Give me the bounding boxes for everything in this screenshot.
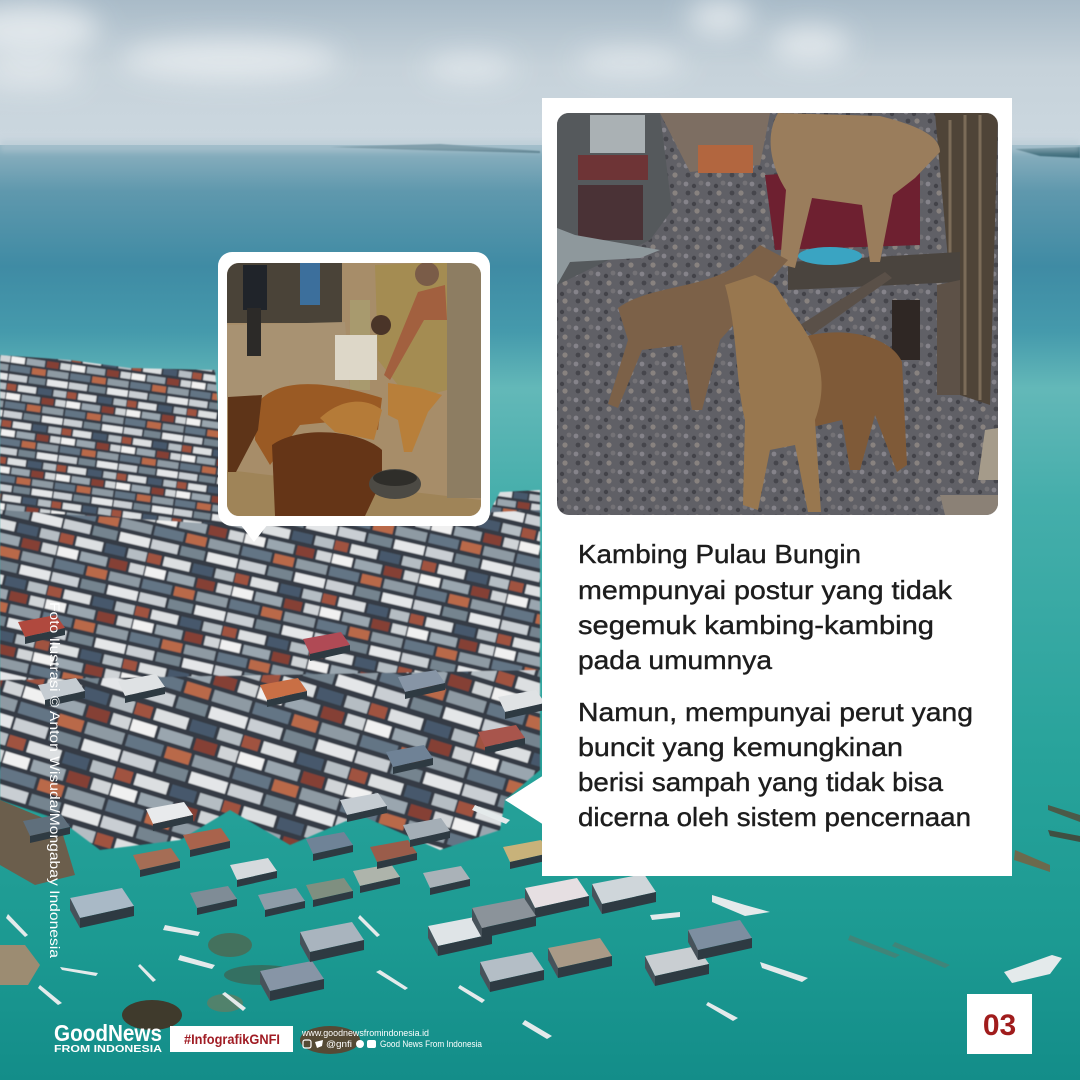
text block: paragraph 1: segemuk kambing-kambing [578, 610, 934, 640]
text block: paragraph 1: pada umumnya [578, 645, 773, 675]
website and social handles [301, 1028, 482, 1049]
text block: paragraph 2: Namun, mempunyai perut yang [578, 697, 973, 727]
photo credit: Foto Ilustrasi © Anton Wisuda/Mongabay Indonesia [47, 602, 62, 959]
text block: paragraph 2 [578, 697, 973, 832]
distant rooftops [0, 355, 540, 565]
goat on bench [771, 113, 940, 268]
shore and shallows [0, 800, 75, 885]
photo: goats on gravel [557, 113, 998, 515]
callout frame: small goat photo [218, 252, 490, 542]
boats [6, 805, 1080, 1039]
stilt houses [18, 615, 752, 1001]
dense foreground rooftops [0, 670, 540, 850]
hashtag badge: #InfografikGNFI [184, 1031, 280, 1047]
website and social handles: Good News From Indonesia [380, 1039, 482, 1049]
website and social handles: @gnfi [326, 1039, 352, 1049]
middle rooftops [0, 510, 540, 690]
goat right [800, 332, 907, 472]
logo: GoodNews From Indonesia: FROM INDONESIA [54, 1043, 162, 1055]
text block: paragraph 2: berisi sampah yang tidak bisa [578, 767, 944, 797]
panel: text and goat photo [505, 98, 1012, 876]
text block: paragraph 2: buncit yang kemungkinan [578, 732, 903, 762]
page number [967, 994, 1032, 1054]
page number: 03 [983, 1009, 1016, 1042]
photo: goats and man at wooden house [227, 262, 481, 516]
goat left [608, 245, 788, 410]
text block: paragraph 1 [578, 539, 953, 675]
text block: paragraph 1: mempunyai postur yang tidak [578, 575, 953, 605]
text block: paragraph 2: dicerna oleh sistem pencernaan [578, 802, 971, 832]
logo: GoodNews From Indonesia: GoodNews [54, 1020, 162, 1046]
logo: GoodNews From Indonesia [54, 1020, 162, 1055]
icon: social media [303, 1040, 376, 1048]
goat front [725, 275, 822, 512]
text block: paragraph 1: Kambing Pulau Bungin [578, 539, 861, 569]
village of stilt houses [0, 355, 1080, 1054]
hashtag badge [170, 1026, 293, 1052]
website and social handles: www.goodnewsfromindonesia.id [301, 1028, 429, 1038]
